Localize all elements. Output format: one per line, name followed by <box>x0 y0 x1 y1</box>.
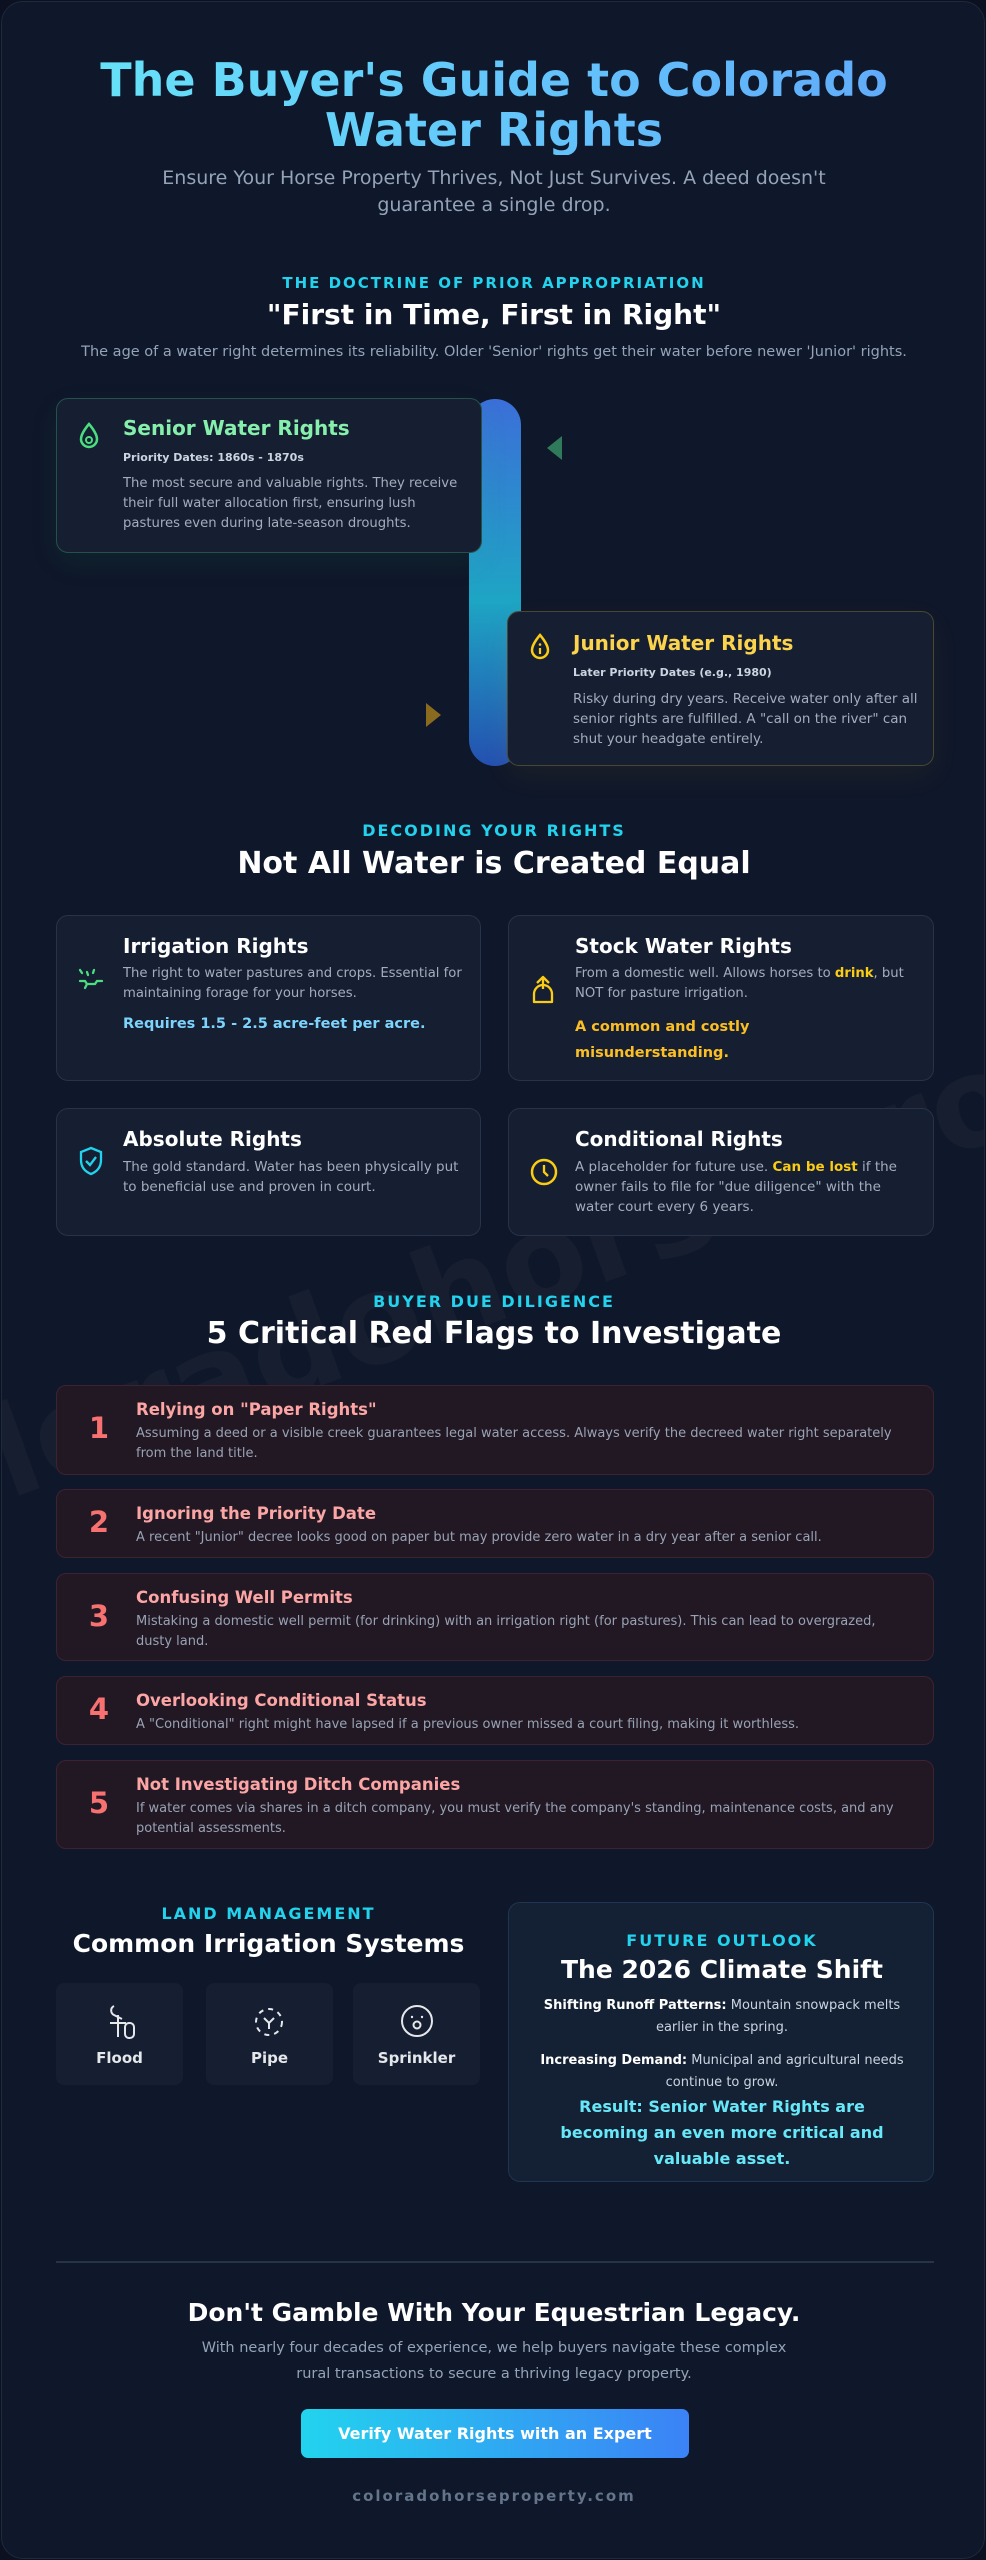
icon: drop <box>80 422 98 448</box>
flag 1 <box>56 1385 934 1475</box>
section label: due diligence: BUYER DUE DILIGENCE <box>373 1292 615 1311</box>
senior body: The most secure and valuable rights. They receive their full water allocation first, ensuring lush pastures even during late-season droughts. <box>123 476 457 531</box>
divider <box>56 2261 934 2263</box>
heading: irrigation systems: Common Irrigation Systems <box>73 1929 464 1958</box>
flag 2 <box>56 1489 934 1558</box>
tile: pipe: Pipe <box>251 2049 288 2067</box>
tile: pipe <box>206 1983 333 2085</box>
label: FUTURE OUTLOOK <box>626 1931 818 1950</box>
title: Stock Water Rights <box>575 934 792 958</box>
senior title: Senior Water Rights <box>123 416 350 440</box>
icon: drop info <box>530 633 550 660</box>
heading: The 2026 Climate Shift <box>561 1955 883 1984</box>
flag 3: 3 <box>89 1599 109 1633</box>
body: From a domestic well. Allows horses to drink, but NOT for pasture irrigation. <box>575 966 904 1001</box>
panel: senior water rights <box>56 398 482 553</box>
panel: future outlook <box>508 1902 934 2182</box>
flag 3: Confusing Well Permits <box>136 1588 353 1607</box>
highlight: Requires 1.5 - 2.5 acre-feet per acre. <box>123 1016 426 1032</box>
heading: not all water: Not All Water is Created Equal <box>237 846 751 881</box>
subtitle: Ensure Your Horse Property Thrives, Not Just Survives. A deed doesn't guarantee a single drop. <box>162 167 826 216</box>
body: A placeholder for future use. Can be lost if the owner fails to file for "due diligence" with the water court every 6 years. <box>575 1159 897 1215</box>
point 1: Shifting Runoff Patterns: Mountain snowpack melts earlier in the spring. <box>544 1998 900 2035</box>
flag 5: Not Investigating Ditch Companies <box>136 1775 460 1794</box>
flag 2: Ignoring the Priority Date <box>136 1504 376 1523</box>
title: Conditional Rights <box>575 1127 783 1151</box>
section label: doctrine: THE DOCTRINE OF PRIOR APPROPRIATION <box>282 274 706 292</box>
point 2: Increasing Demand: Municipal and agricultural needs continue to grow. <box>540 2053 904 2090</box>
junior body: Risky during dry years. Receive water only after all senior rights are fulfilled. A "call on the river" can shut your headgate entirely. <box>573 691 918 747</box>
flag 4 <box>56 1676 934 1745</box>
footer: coloradohorseproperty.com <box>352 2487 636 2505</box>
section label: land management: LAND MANAGEMENT <box>161 1904 376 1923</box>
section label: decoding: DECODING YOUR RIGHTS <box>362 821 626 840</box>
card: conditional rights <box>508 1108 934 1236</box>
tile: flood: Flood <box>96 2049 143 2067</box>
card: stock water rights <box>508 915 934 1081</box>
body: The gold standard. Water has been physically put to beneficial use and proven in court. <box>123 1159 458 1195</box>
flag 4: Overlooking Conditional Status <box>136 1691 427 1710</box>
icon: irrigation <box>78 968 104 990</box>
flag 3 <box>56 1573 934 1661</box>
icon: shield <box>80 1146 102 1176</box>
title <box>2 55 986 155</box>
icon: clock <box>530 1158 558 1186</box>
CTA heading: Don't Gamble With Your Equestrian Legacy. <box>188 2298 800 2327</box>
panel: junior water rights <box>507 611 934 766</box>
arrow: senior <box>547 436 562 460</box>
title: The Buyer's Guide to Colorado <box>100 53 888 107</box>
card: absolute rights <box>56 1108 481 1236</box>
flag 5: If water comes via shares in a ditch company, you must verify the company's standing, maintenance costs, and any potential assessments. <box>136 1801 894 1836</box>
CTA text: With nearly four decades of experience, we help buyers navigate these complex rural transactions to secure a thriving legacy property. <box>202 2340 786 2382</box>
button: Verify Water Rights with an Expert <box>338 2424 652 2443</box>
result: Result: Senior Water Rights are becoming an even more critical and valuable asset. <box>560 2097 884 2168</box>
card: irrigation rights <box>56 915 481 1081</box>
flag 5: 5 <box>89 1786 109 1820</box>
heading: first in time: "First in Time, First in Right" <box>267 298 721 331</box>
flag 2: 2 <box>89 1505 109 1539</box>
flag 1: Assuming a deed or a visible creek guarantees legal water access. Always verify the decreed water right separately from the land title. <box>136 1426 892 1461</box>
flag 1: 1 <box>89 1411 109 1445</box>
tile: flood <box>56 1983 183 2085</box>
flag 5 <box>56 1760 934 1849</box>
title: Water Rights <box>325 103 663 157</box>
highlight: A common and costly misunderstanding. <box>575 1019 749 1061</box>
junior dates: Later Priority Dates (e.g., 1980) <box>573 666 772 679</box>
flag 3: Mistaking a domestic well permit (for drinking) with an irrigation right (for pastures). This can lead to overgrazed, dusty land. <box>136 1614 875 1649</box>
junior title: Junior Water Rights <box>573 631 793 655</box>
description: The age of a water right determines its reliability. Older 'Senior' rights get their water before newer 'Junior' rights. <box>81 344 907 360</box>
senior dates: Priority Dates: 1860s - 1870s <box>123 451 304 464</box>
title: Irrigation Rights <box>123 934 308 958</box>
heading: red flags: 5 Critical Red Flags to Investigate <box>207 1316 781 1351</box>
flag 4: A "Conditional" right might have lapsed if a previous owner missed a court filing, making it worthless. <box>136 1717 799 1732</box>
timeline bar <box>469 399 521 766</box>
button <box>301 2409 689 2458</box>
icon: tap <box>532 976 554 1004</box>
tile: sprinkler <box>353 1983 480 2085</box>
flag 2: A recent "Junior" decree looks good on paper but may provide zero water in a dry year after a senior call. <box>136 1530 822 1545</box>
arrow: junior <box>426 703 441 727</box>
flag 1: Relying on "Paper Rights" <box>136 1400 377 1419</box>
title: Absolute Rights <box>123 1127 302 1151</box>
tile: sprinkler: Sprinkler <box>378 2049 455 2067</box>
flag 4: 4 <box>89 1692 109 1726</box>
body: The right to water pastures and crops. Essential for maintaining forage for your horses. <box>123 966 462 1001</box>
